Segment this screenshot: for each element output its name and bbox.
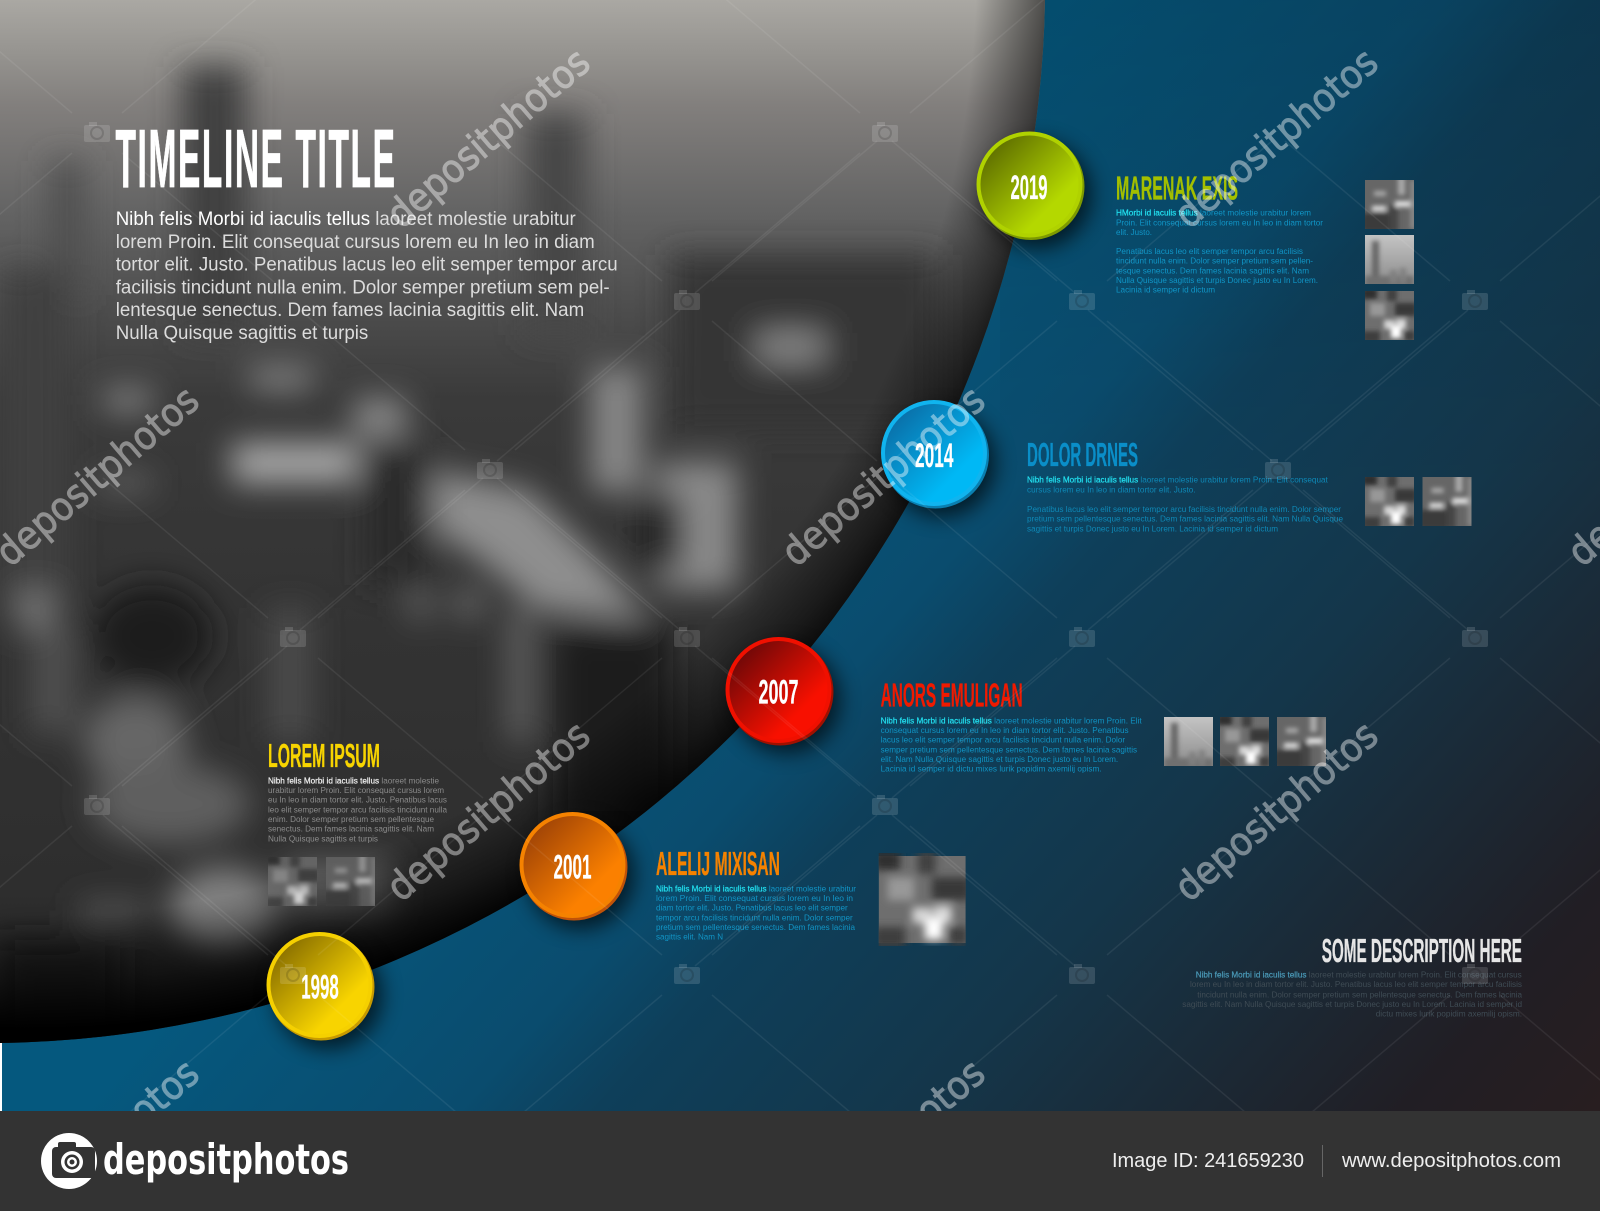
milestone: Anors Emuligan: ANORS EMULIGAN — [881, 678, 1023, 714]
text: Marenak Exis body: tesque senectus. Dem fames lacinia sagittis elit. Nam — [1116, 265, 1309, 275]
text: Lorem Ipsum body — [268, 775, 448, 843]
text: Anors Emuligan body: Nibh felis Morbi id iaculis tellus laoreet molestie urabitur lorem Proin. Elit — [881, 715, 1142, 725]
milestone: Alelij Mixisan: ALELIJ MIXISAN — [656, 846, 780, 883]
infographic canvas: TIMELINE TITLE — [116, 112, 396, 205]
timeline node: 2014 — [881, 400, 996, 517]
intro text block: tortor elit. Justo. Penatibus lacus leo elit semper tempor arcu — [116, 255, 618, 276]
text: Lorem Ipsum body: Nulla Quisque sagittis et turpis — [268, 833, 379, 843]
text: Marenak Exis body: Nulla Quisque sagittis et turpis Donec justo eu In Lorem. — [1116, 275, 1318, 285]
timeline node: 2001: 2001 — [554, 849, 592, 887]
text: Marenak Exis body: HMorbi id iaculis tellus laoreet molestie urabitur lorem — [1116, 208, 1311, 218]
panel: blurred city photo circle — [0, 0, 1050, 1050]
text: Alelij Mixisan body: lorem Proin. Elit consequat cursus lorem eu In leo in — [656, 893, 853, 903]
thumbnails: Lorem Ipsum — [265, 854, 378, 909]
text: Alelij Mixisan body: tempor arcu facilisis tincidunt nulla enim. Dolor semper — [656, 912, 853, 922]
white sliver at left edge — [0, 1043, 2, 1111]
text: Marenak Exis body: elit. Justo. — [1116, 227, 1152, 237]
logo wordmark: depositphotos — [103, 1135, 349, 1184]
timeline node: 1998: 1998 — [301, 969, 339, 1007]
intro text block: lorem Proin. Elit consequat cursus lorem eu In leo in diam — [116, 232, 595, 253]
text: Marenak Exis body: Lacinia id semper id dictum — [1116, 285, 1215, 295]
text: Dolor Drnes body — [1027, 475, 1343, 533]
text: Anors Emuligan body: lacus leo elit semper tempor arcu facilisis tincidunt nulla enim. Dolor — [881, 735, 1125, 745]
intro text block: facilisis tincidunt nulla enim. Dolor semper pretium sem pel- — [116, 277, 610, 298]
website url: www.depositphotos.com — [1341, 1150, 1561, 1172]
text: Lorem Ipsum body: urabitur lorem Proin. Elit consequat cursus lorem — [268, 785, 444, 795]
text: Dolor Drnes body: pretium sem pellentesque senectus. Dem fames lacinia sagittis elit. Nam Nulla Quisque — [1027, 514, 1343, 524]
icon: depositphotos camera logo — [41, 1133, 97, 1189]
milestone: Marenak Exis: MARENAK EXIS — [1116, 170, 1238, 208]
text: Lorem Ipsum body: leo elit semper tempor arcu facilisis tincidunt nulla — [268, 804, 447, 814]
text: Alelij Mixisan body: pretium sem pellentesque senectus. Dem fames lacinia — [656, 922, 855, 932]
thumbnail: Alelij Mixisan — [873, 851, 971, 948]
intro text block: Nulla Quisque sagittis et turpis — [116, 323, 368, 344]
milestone: Dolor Drnes: DOLOR DRNES — [1027, 437, 1138, 474]
text: Alelij Mixisan body — [656, 883, 856, 942]
milestone: Alelij Mixisan — [656, 846, 971, 948]
intro text block: lentesque senectus. Dem fames lacinia sagittis elit. Nam — [116, 300, 584, 321]
timeline node: 2014: 2014 — [915, 437, 954, 475]
text: Dolor Drnes body: cursus lorem eu In leo in diam tortor elit. Justo. — [1027, 484, 1196, 494]
text: description body: sagittis elit. Nam Nulla Quisque sagittis et turpis Donec justo eu In Lorem. Lacinia id semper id — [1182, 999, 1522, 1009]
watermark: diagonal depositphotos text: depositphotos — [378, 713, 599, 911]
text: Alelij Mixisan body: Nibh felis Morbi id iaculis tellus laoreet molestie urabitur — [656, 883, 856, 893]
text: Alelij Mixisan body: diam tortor elit. Justo. Penatibus lacus leo elit semper — [656, 903, 848, 913]
text: Lorem Ipsum body: senectus. Dem fames lacinia sagittis elit. Nam — [268, 824, 434, 834]
watermark: diagonal depositphotos text: depositphotos — [378, 40, 599, 238]
timeline node: 2019 — [976, 132, 1092, 248]
text: description body: Nibh felis Morbi id iaculis tellus laoreet molestie urabitur lorem Proin. Elit consequat cursus — [1196, 969, 1522, 979]
footer separator — [1322, 1145, 1323, 1177]
timeline node: 2007 — [726, 637, 840, 754]
text: description body: tincidunt nulla enim. Dolor semper pretium sem pellentesque senectus. Dem fames lacinia — [1197, 990, 1522, 1000]
intro text block: Nibh felis Morbi id iaculis tellus laoreet molestie urabitur — [116, 209, 576, 230]
watermark: diagonal depositphotos text: depositphotos — [1166, 40, 1387, 238]
thumbnails: Marenak Exis — [1362, 177, 1417, 343]
text: description body — [1182, 969, 1523, 1019]
text: Marenak Exis body: Penatibus lacus leo elit semper tempor arcu facilisis — [1116, 246, 1304, 256]
timeline node: 2007: 2007 — [758, 674, 798, 712]
text: Dolor Drnes body: sagittis et turpis Donec justo eu In Lorem. Lacinia id semper id dictum — [1027, 523, 1278, 533]
text: Anors Emuligan body: elit. Nam Nulla Quisque sagittis et turpis Donec justo eu In Lorem. — [881, 754, 1118, 764]
image id: Image ID: 241659230 — [1112, 1150, 1304, 1172]
text: Anors Emuligan body — [881, 715, 1142, 774]
text: Lorem Ipsum body: Nibh felis Morbi id iaculis tellus laoreet molestie — [268, 775, 439, 785]
milestone: Lorem Ipsum text and thumbnails — [265, 738, 448, 909]
footer bar — [0, 1111, 1600, 1211]
text: Anors Emuligan body: Lacinia id semper id dictu mixes lurik popidim axemilij opism. — [881, 764, 1102, 774]
text: Dolor Drnes body: Nibh felis Morbi id iaculis tellus laoreet molestie urabitur lorem Proin. Elit consequat — [1027, 475, 1328, 485]
text: description body: lorem eu In leo in diam tortor elit. Justo. Penatibus lacus leo elit semper tempor arcu facilisis — [1190, 979, 1523, 989]
milestone: Anors Emuligan — [881, 678, 1329, 774]
milestone: Lorem Ipsum text and thumbnails: LOREM IPSUM — [268, 738, 380, 775]
timeline node: 1998 — [266, 932, 382, 1049]
timeline node: 2001 — [520, 812, 634, 929]
text: Marenak Exis body — [1116, 208, 1323, 295]
text: Dolor Drnes body: Penatibus lacus leo elit semper tempor arcu facilisis tincidunt nulla enim. Dolor semper — [1027, 504, 1341, 514]
text: Marenak Exis body: Proin. Elit consequat cursus lorem eu In leo in diam tortor — [1116, 217, 1323, 227]
watermark: diagonal depositphotos text: depositphotos — [1166, 713, 1387, 911]
description block — [1182, 933, 1523, 1019]
text: Lorem Ipsum body: enim. Dolor semper pretium sem pellentesque — [268, 814, 434, 824]
timeline node: 2019: 2019 — [1010, 169, 1048, 207]
thumbnails: Anors Emuligan — [1164, 714, 1329, 770]
watermark: diagonal depositphotos text: depositphotos — [773, 378, 994, 576]
text: description body: dictu mixes lurik popidim axemilij opism. — [1376, 1009, 1522, 1019]
text: Anors Emuligan body: semper pretium sem pellentesque senectus. Dem fames lacinia sagittis — [881, 744, 1138, 754]
milestone: Marenak Exis — [1116, 170, 1417, 343]
intro text block — [116, 209, 618, 344]
text: Lorem Ipsum body: eu In leo in diam tortor elit. Justo. Penatibus lacus — [268, 795, 448, 805]
text: Marenak Exis body: tincidunt nulla enim. Dolor semper pretium sem pellen- — [1116, 256, 1313, 266]
text: Anors Emuligan body: consequat cursus lorem eu In leo in diam tortor elit. Justo. Penatibus — [881, 725, 1129, 735]
milestone: Dolor Drnes — [1027, 437, 1474, 533]
text: Alelij Mixisan body: sagittis elit. Nam N — [656, 932, 723, 942]
thumbnails: Dolor Drnes — [1362, 474, 1474, 529]
